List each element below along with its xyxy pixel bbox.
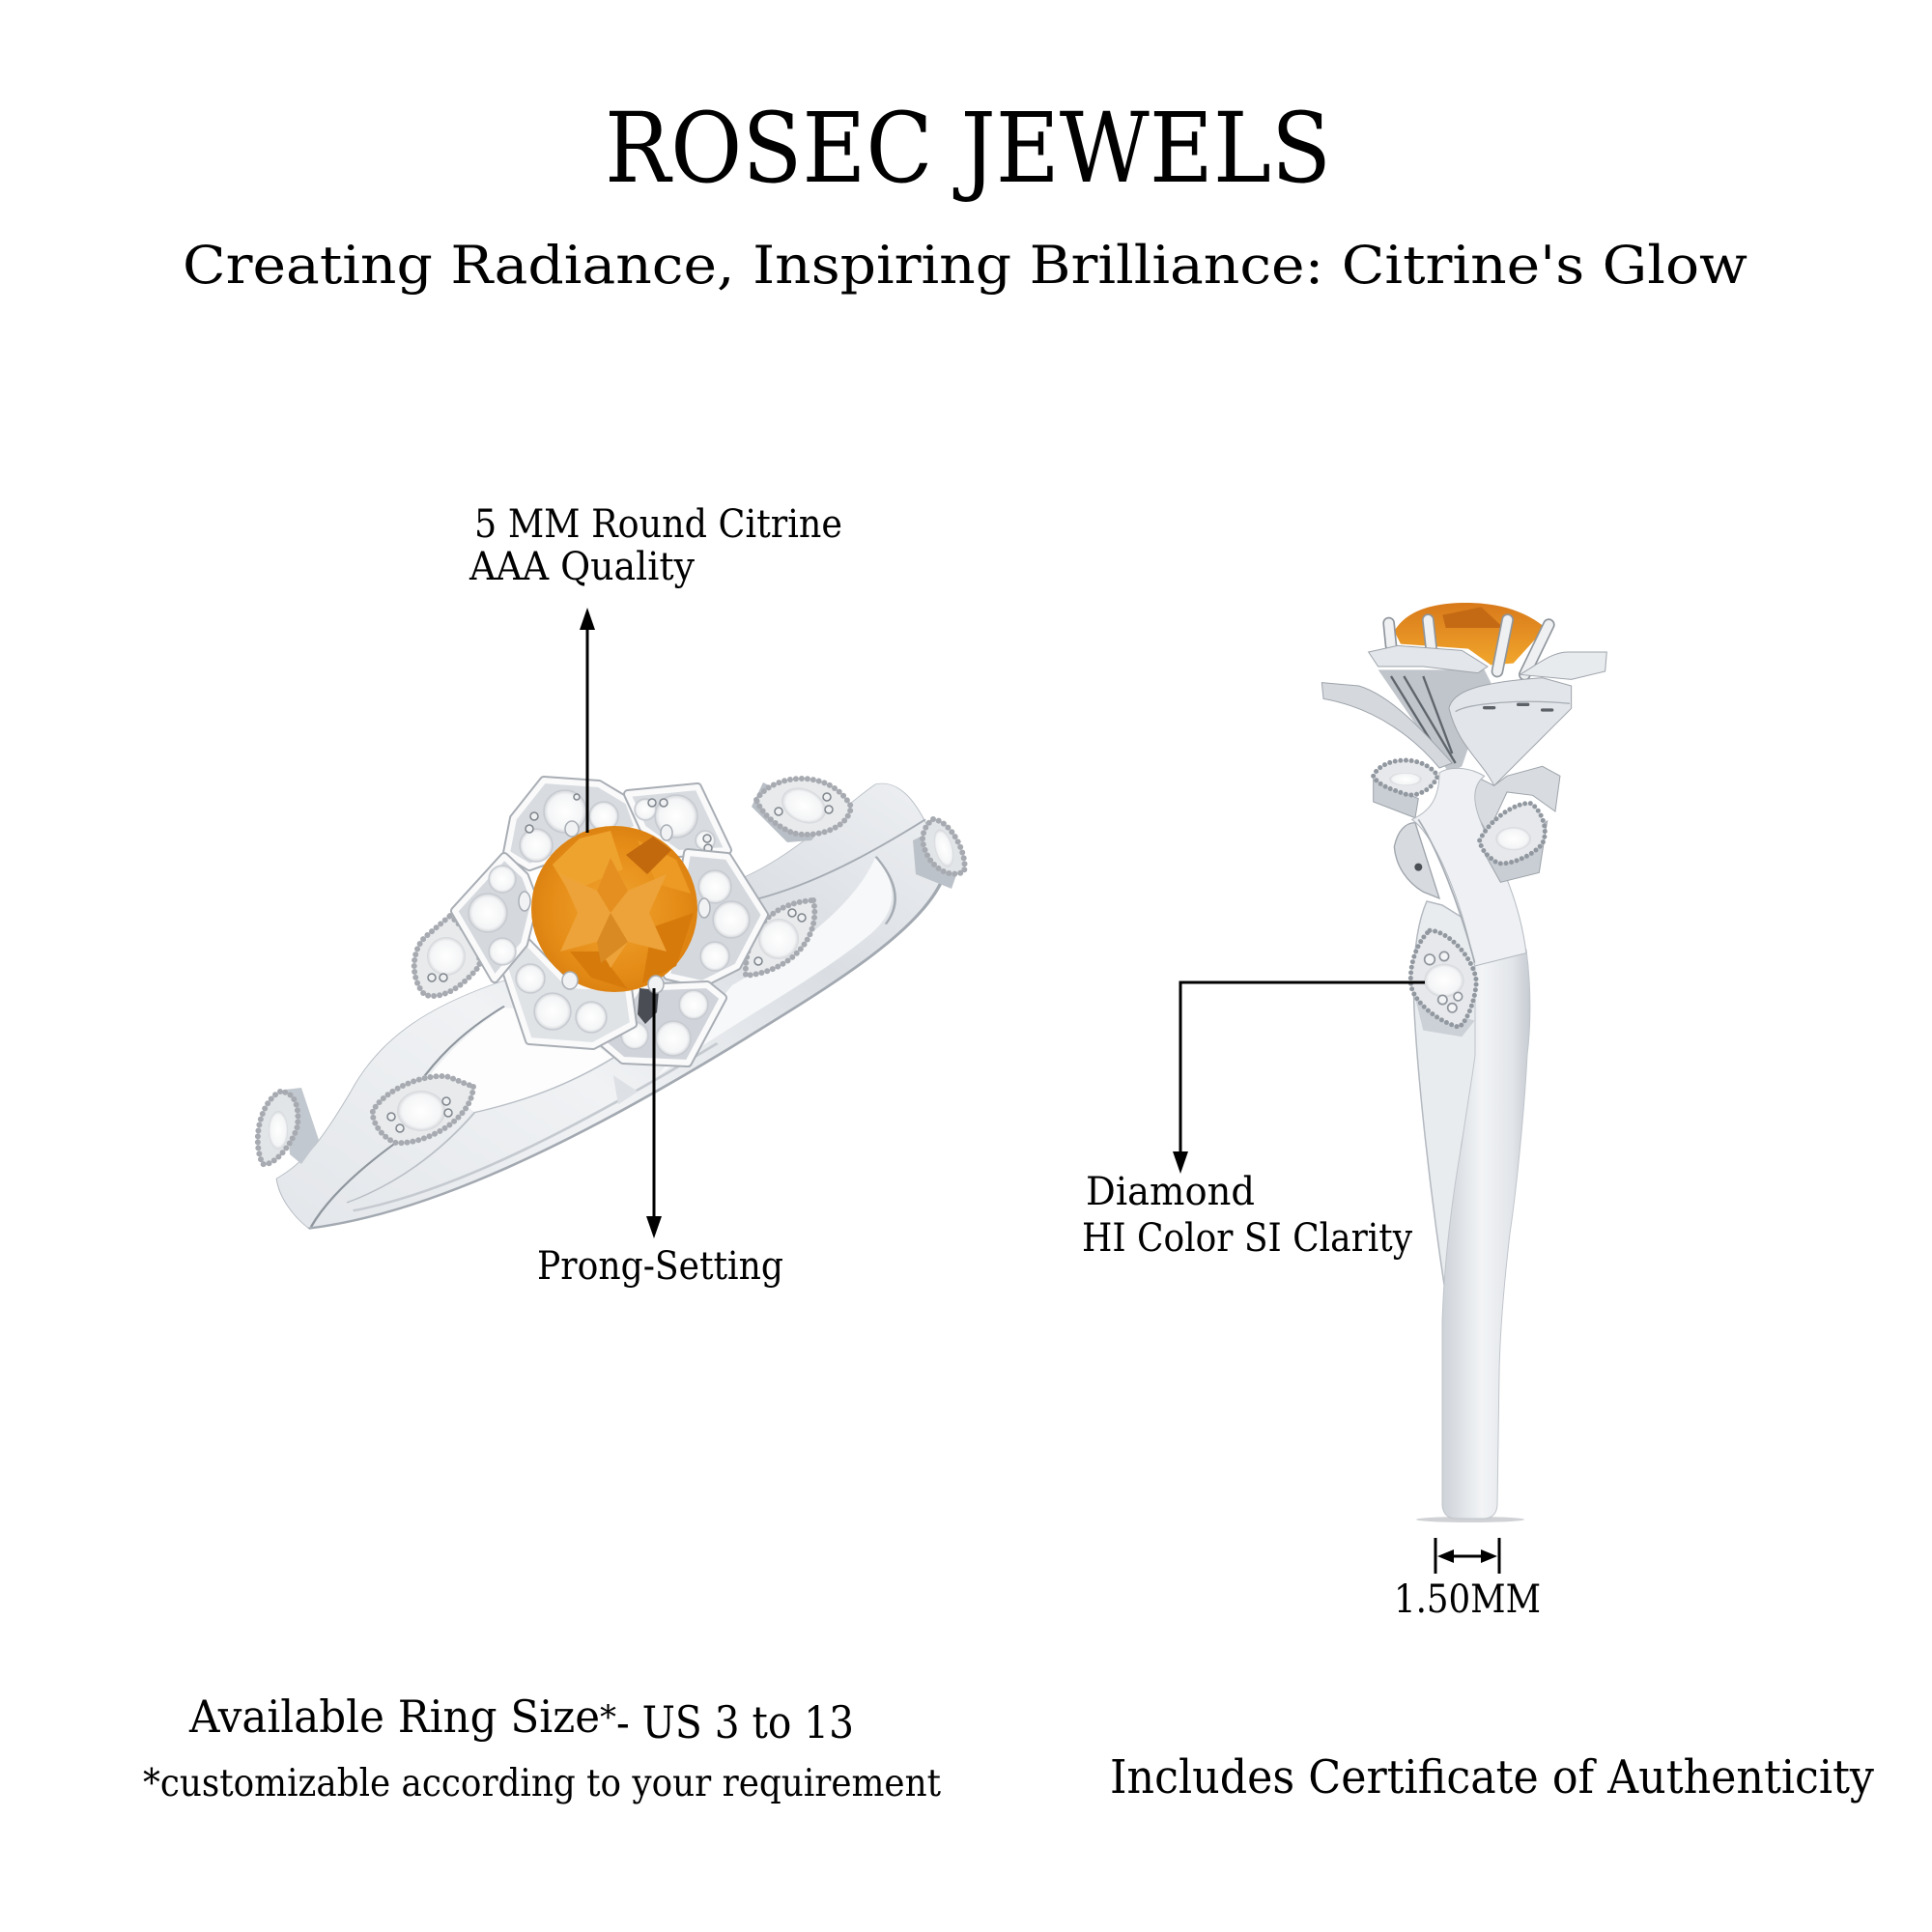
side shank shadow (1416, 1517, 1524, 1522)
leaf: diamond highlighted (1410, 930, 1476, 1037)
arrow: to citrine (580, 608, 595, 833)
leaf: upper right behind (1468, 766, 1560, 834)
petal: left (455, 857, 534, 979)
prongs (1389, 620, 1548, 674)
leaf: far left (258, 1088, 319, 1164)
callout: diamond: HI Color SI Clarity (1082, 1216, 1412, 1261)
left petal (1321, 683, 1452, 768)
ring size note: Available Ring Size (188, 1690, 600, 1743)
callout: diamond (1082, 1170, 1412, 1261)
callout: diamond: Diamond (1086, 1170, 1255, 1214)
title: ROSEC JEWELS (605, 92, 1331, 205)
leaf: far right (913, 819, 965, 889)
dimension marker (1435, 1538, 1499, 1574)
dimension label: 1.50MM (1394, 1577, 1541, 1622)
callout: prong setting: Prong-Setting (537, 1244, 783, 1289)
prongs (519, 821, 710, 993)
side shank front strand (1442, 934, 1530, 1519)
certificate note: Includes Certificate of Authenticity (1110, 1750, 1874, 1804)
side leaf behind (1394, 823, 1439, 898)
leaf: upper left (1374, 760, 1437, 818)
citrine side view (1394, 603, 1546, 665)
ring bands (276, 783, 945, 1229)
back petal right (1520, 652, 1606, 679)
petal: bottom right (604, 985, 723, 1063)
callout: citrine label: AAA Quality (469, 545, 695, 589)
back petal left (1369, 645, 1488, 673)
petal: bottom left (502, 940, 633, 1045)
leaf: top right (752, 779, 851, 842)
petal: right (668, 853, 764, 983)
citrine stone (519, 821, 710, 993)
side shank back strand (1413, 901, 1478, 1285)
leaf: lower left (373, 1076, 473, 1143)
ring size note: *customizable according to your requirement (143, 1762, 941, 1805)
petal: top right (628, 787, 727, 853)
arrow: to diamond (1173, 982, 1425, 1174)
subtitle: Creating Radiance, Inspiring Brilliance: Citrine's Glow (183, 235, 1747, 296)
leaf: right of flower (746, 900, 814, 976)
leaf: left of flower (414, 916, 480, 996)
front petal (1449, 678, 1572, 785)
leaf: lower right (1480, 804, 1548, 882)
central knot (1412, 768, 1526, 966)
callout: citrine label (469, 502, 842, 589)
ring size note (143, 1690, 941, 1805)
ring side view (1321, 603, 1606, 1522)
petal: top left (507, 781, 638, 867)
flower halo (455, 781, 764, 1063)
callout: citrine label: 5 MM Round Citrine (474, 502, 842, 547)
ring size note: - US 3 to 13 (616, 1696, 854, 1748)
arrow: to prong setting (646, 988, 662, 1238)
side ring head in traced coordinates (1321, 603, 1606, 1037)
flower stem (1378, 669, 1491, 773)
ring size note: * (600, 1698, 616, 1737)
ring front view (258, 779, 965, 1229)
